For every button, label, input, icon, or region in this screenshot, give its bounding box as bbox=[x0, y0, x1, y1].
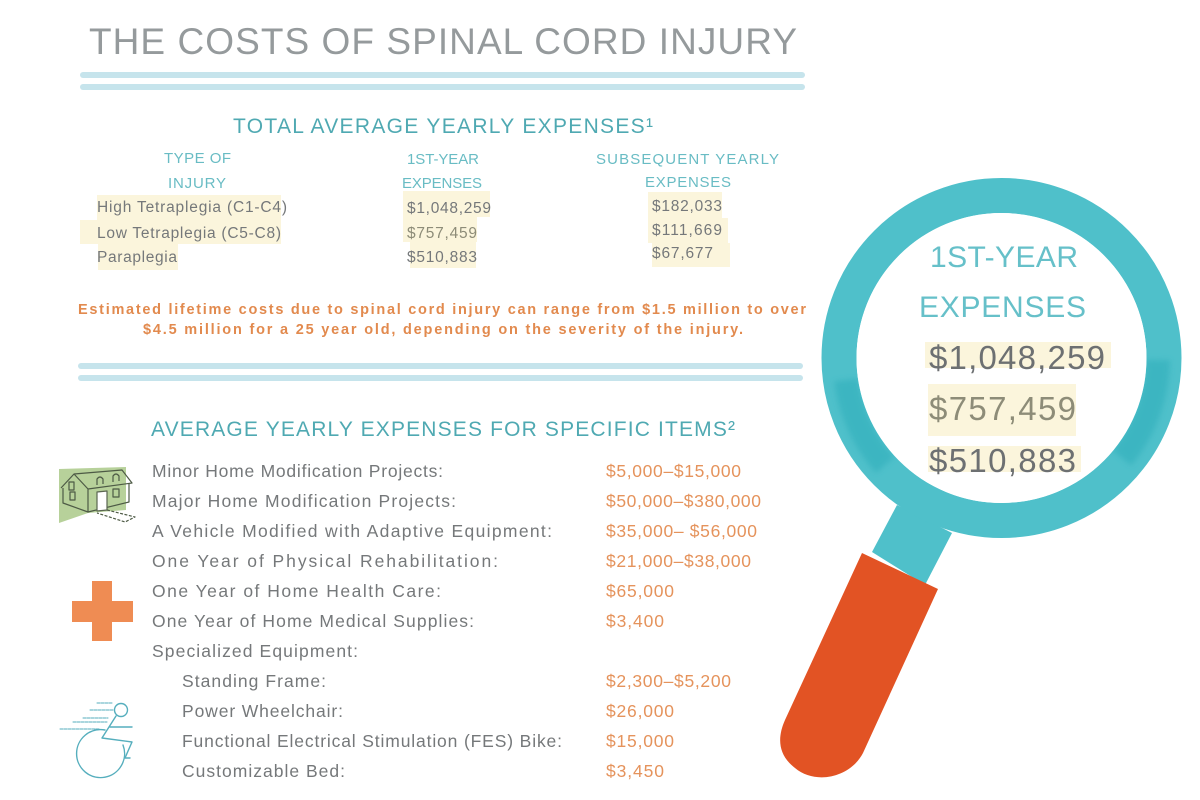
magnified values: $757,459 bbox=[929, 390, 1076, 427]
table rows: $757,459 bbox=[407, 225, 477, 242]
icon: house bbox=[59, 467, 135, 523]
item costs: $35,000– $56,000 bbox=[606, 521, 757, 541]
item labels: One Year of Home Health Care: bbox=[152, 581, 441, 601]
magnified highlights bbox=[925, 342, 1111, 472]
item labels: Minor Home Modification Projects: bbox=[152, 461, 443, 481]
table column headers: INJURY bbox=[168, 175, 226, 192]
lifetime costs note: Estimated lifetime costs due to spinal cord injury can range from $1.5 million to over bbox=[78, 302, 806, 318]
table rows bbox=[97, 198, 722, 266]
item costs: $15,000 bbox=[606, 731, 674, 751]
panel: average yearly expenses for specific items bbox=[59, 418, 761, 781]
item costs: $3,450 bbox=[606, 761, 664, 781]
lens glass bbox=[856, 213, 1146, 503]
heading: total average yearly expenses: TOTAL AVERAGE YEARLY EXPENSES¹ bbox=[233, 115, 653, 138]
item costs: $26,000 bbox=[606, 701, 674, 721]
lifetime costs note: $4.5 million for a 25 year old, depending on the severity of the injury. bbox=[143, 322, 743, 338]
magnified column header: EXPENSES bbox=[919, 291, 1086, 324]
lens ring bbox=[839, 196, 1164, 520]
lifetime costs note bbox=[78, 302, 806, 338]
item labels: One Year of Home Medical Supplies: bbox=[152, 611, 474, 631]
item labels: Standing Frame: bbox=[182, 671, 326, 691]
item costs: $50,000–$380,000 bbox=[606, 491, 761, 511]
table rows: High Tetraplegia (C1-C4) bbox=[97, 199, 287, 216]
item labels: Power Wheelchair: bbox=[182, 701, 343, 721]
table rows: Paraplegia bbox=[97, 249, 177, 266]
magnified values bbox=[929, 339, 1105, 479]
item labels: One Year of Physical Rehabilitation: bbox=[152, 551, 498, 571]
table rows: $1,048,259 bbox=[407, 200, 491, 217]
item costs: $21,000–$38,000 bbox=[606, 551, 751, 571]
table column headers: EXPENSES bbox=[402, 175, 482, 192]
item costs: $2,300–$5,200 bbox=[606, 671, 731, 691]
icon: wheelchair bbox=[60, 703, 132, 778]
table column headers: TYPE OF bbox=[164, 150, 231, 167]
panel: total average yearly expenses bbox=[78, 115, 806, 338]
table column headers: SUBSEQUENT YEARLY bbox=[596, 151, 779, 168]
table highlights bbox=[80, 191, 730, 270]
handle grip bbox=[780, 553, 938, 777]
item costs: $3,400 bbox=[606, 611, 664, 631]
item labels: Major Home Modification Projects: bbox=[152, 491, 456, 511]
table rows: $510,883 bbox=[407, 249, 477, 266]
heading: specific items: AVERAGE YEARLY EXPENSES FOR SPECIFIC ITEMS² bbox=[151, 418, 735, 441]
item labels bbox=[152, 461, 562, 781]
icon: medical cross bbox=[72, 581, 133, 641]
magnifying glass bbox=[780, 196, 1164, 777]
table column headers: 1ST-YEAR bbox=[407, 151, 479, 168]
magnified values: $1,048,259 bbox=[929, 339, 1105, 376]
item labels: Specialized Equipment: bbox=[152, 641, 358, 661]
table column headers bbox=[164, 150, 779, 192]
table rows: Low Tetraplegia (C5-C8) bbox=[97, 225, 281, 242]
item costs: $5,000–$15,000 bbox=[606, 461, 741, 481]
magnified column header bbox=[919, 241, 1086, 324]
handle neck bbox=[872, 505, 952, 585]
title: THE COSTS OF SPINAL CORD INJURY bbox=[89, 21, 797, 62]
magnified column header: 1ST-YEAR bbox=[930, 241, 1078, 274]
table rows: $182,033 bbox=[652, 198, 722, 215]
table rows: $67,677 bbox=[652, 245, 713, 262]
magnified values: $510,883 bbox=[929, 442, 1076, 479]
item costs: $65,000 bbox=[606, 581, 674, 601]
table column headers: EXPENSES bbox=[645, 174, 731, 191]
item costs bbox=[606, 461, 761, 781]
item labels: Functional Electrical Stimulation (FES) Bike: bbox=[182, 731, 562, 751]
item labels: A Vehicle Modified with Adaptive Equipment: bbox=[152, 521, 552, 541]
ring shading bbox=[846, 360, 1158, 465]
table rows: $111,669 bbox=[652, 222, 722, 239]
item labels: Customizable Bed: bbox=[182, 761, 345, 781]
